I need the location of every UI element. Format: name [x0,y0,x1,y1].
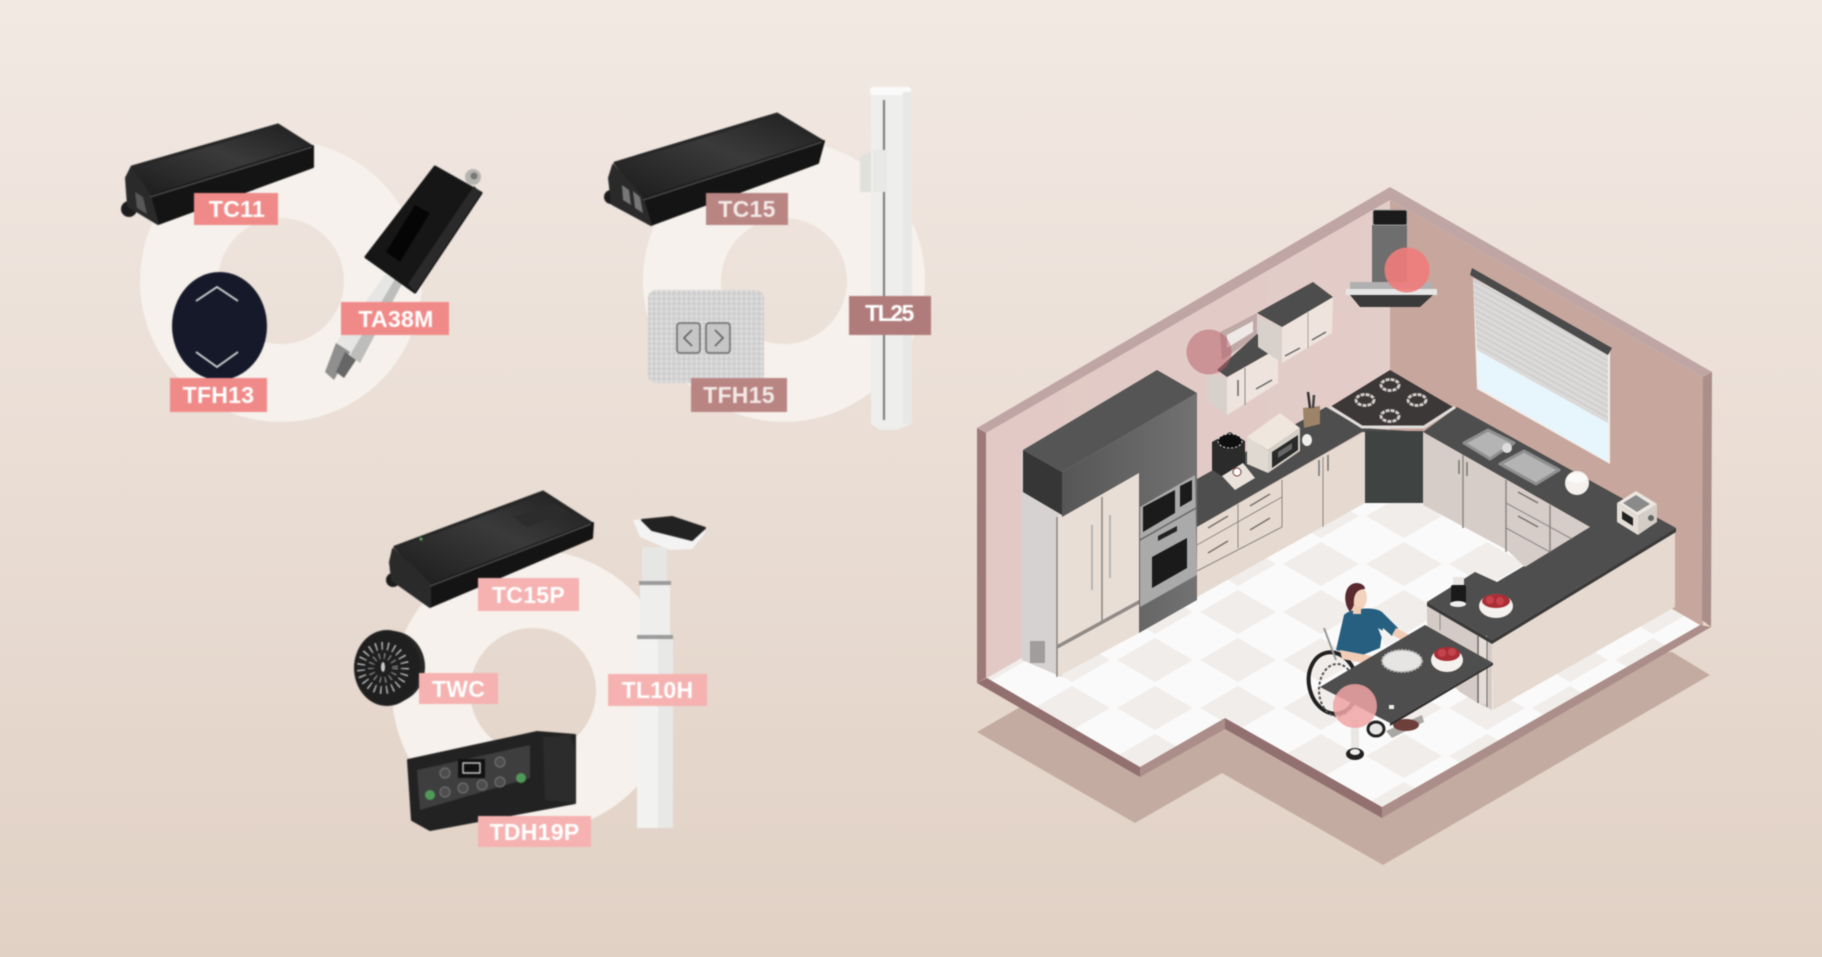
product: TFH15 switch [648,290,764,383]
label: TL25: TL25 [865,300,915,326]
label: TC15 [706,193,788,225]
toaster [1617,491,1657,535]
fridge [1022,370,1197,677]
hotspot: range hood [1384,248,1430,292]
label: TWC: TWC [432,676,485,702]
knife block [1303,392,1320,428]
label: TFH13: TFH13 [183,382,254,408]
fruit bowl on peninsula [1479,594,1513,618]
floor shadow [977,652,1710,865]
product: TC11 controller [121,125,313,224]
product group: TC11 TA38M TFH13 [121,125,481,422]
label: TC15P [478,578,579,611]
built-in ovens [1140,475,1197,607]
left base cabinets [1197,432,1365,597]
product: TC15 controller [604,114,824,225]
counter front edge [1427,528,1676,644]
back base cabinets [1423,432,1590,567]
ring [643,140,925,422]
stool [1346,720,1364,760]
product: TDH19P handset [408,732,575,830]
label: TC15P: TC15P [492,582,565,608]
product group: TC15 TL25 TFH15 [604,87,931,430]
kitchen illustration [977,187,1712,865]
cooktop [1330,370,1455,427]
product: TL10H lifting column [633,517,706,828]
counter end block [1492,532,1675,710]
ring [392,550,674,832]
sinks [1464,430,1559,484]
bowl on counter [1565,471,1589,495]
oven door under cooktop [1365,431,1423,503]
label: TFH13 [170,378,267,412]
hotspot: wall cabinets [1186,330,1232,374]
jar [1450,577,1466,607]
floor edge [977,625,1711,818]
back counter top [1197,407,1676,640]
window with blind [1470,268,1612,464]
wall right [1390,200,1703,628]
product: TWC charger [354,630,425,706]
wall end strips [977,372,1712,683]
label: TDH19P [478,816,591,847]
label: TL10H: TL10H [622,677,693,703]
label: TC11: TC11 [209,196,265,222]
ring [140,140,422,422]
person in wheelchair [1303,583,1424,738]
label: TL25 [849,296,931,335]
product: TFH13 switch [172,272,267,380]
wall top rim [977,187,1712,433]
microwave on counter [1247,413,1312,473]
label: TC15: TC15 [718,196,776,222]
label: TL10H [608,674,707,706]
label: TA38M: TA38M [358,306,434,332]
peninsula cabinet [1427,606,1492,710]
wall cabinets [1207,282,1333,415]
product group: TC15P TWC TDH19P TL10H [354,492,707,847]
hotspot: stool [1333,684,1377,728]
product: TA38M actuator [325,167,481,380]
coffee machine [1212,432,1255,490]
label: TDH19P: TDH19P [490,819,580,845]
dining table [1320,625,1493,726]
label: TWC [419,673,498,704]
label: TFH15 [691,378,787,412]
label: TC11 [194,193,278,225]
label: TA38M [341,302,449,335]
checkered floor [987,445,1700,807]
product: TL25 column [860,87,912,430]
label: TFH15: TFH15 [703,382,775,408]
range hood [1346,210,1437,307]
wall left [986,200,1390,680]
product: TC15P controller [386,492,593,607]
